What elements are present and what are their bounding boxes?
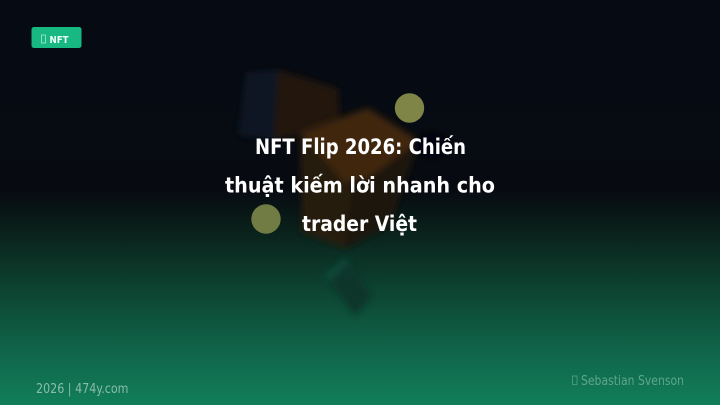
title: thuật kiếm lời nhanh cho <box>225 174 495 198</box>
footer: year and site: 2026 | 474y.com <box>36 382 128 397</box>
small dark cube in the green area <box>323 258 372 316</box>
cube: centre orange <box>300 108 420 248</box>
badge: NFT: NFT <box>50 35 69 46</box>
title <box>225 135 495 236</box>
dark shadow beside cube <box>415 133 449 159</box>
cube: upper left <box>238 70 340 140</box>
blurred cube artwork <box>238 70 449 316</box>
title: trader Việt <box>302 212 417 236</box>
decorative circle: bottom left of title <box>251 204 281 234</box>
footer: author credit: Sebastian Svenson <box>581 374 684 389</box>
title: NFT Flip 2026: Chiến <box>255 135 466 159</box>
badge: NFT <box>32 27 82 48</box>
decorative circle: top right of title <box>395 93 424 123</box>
